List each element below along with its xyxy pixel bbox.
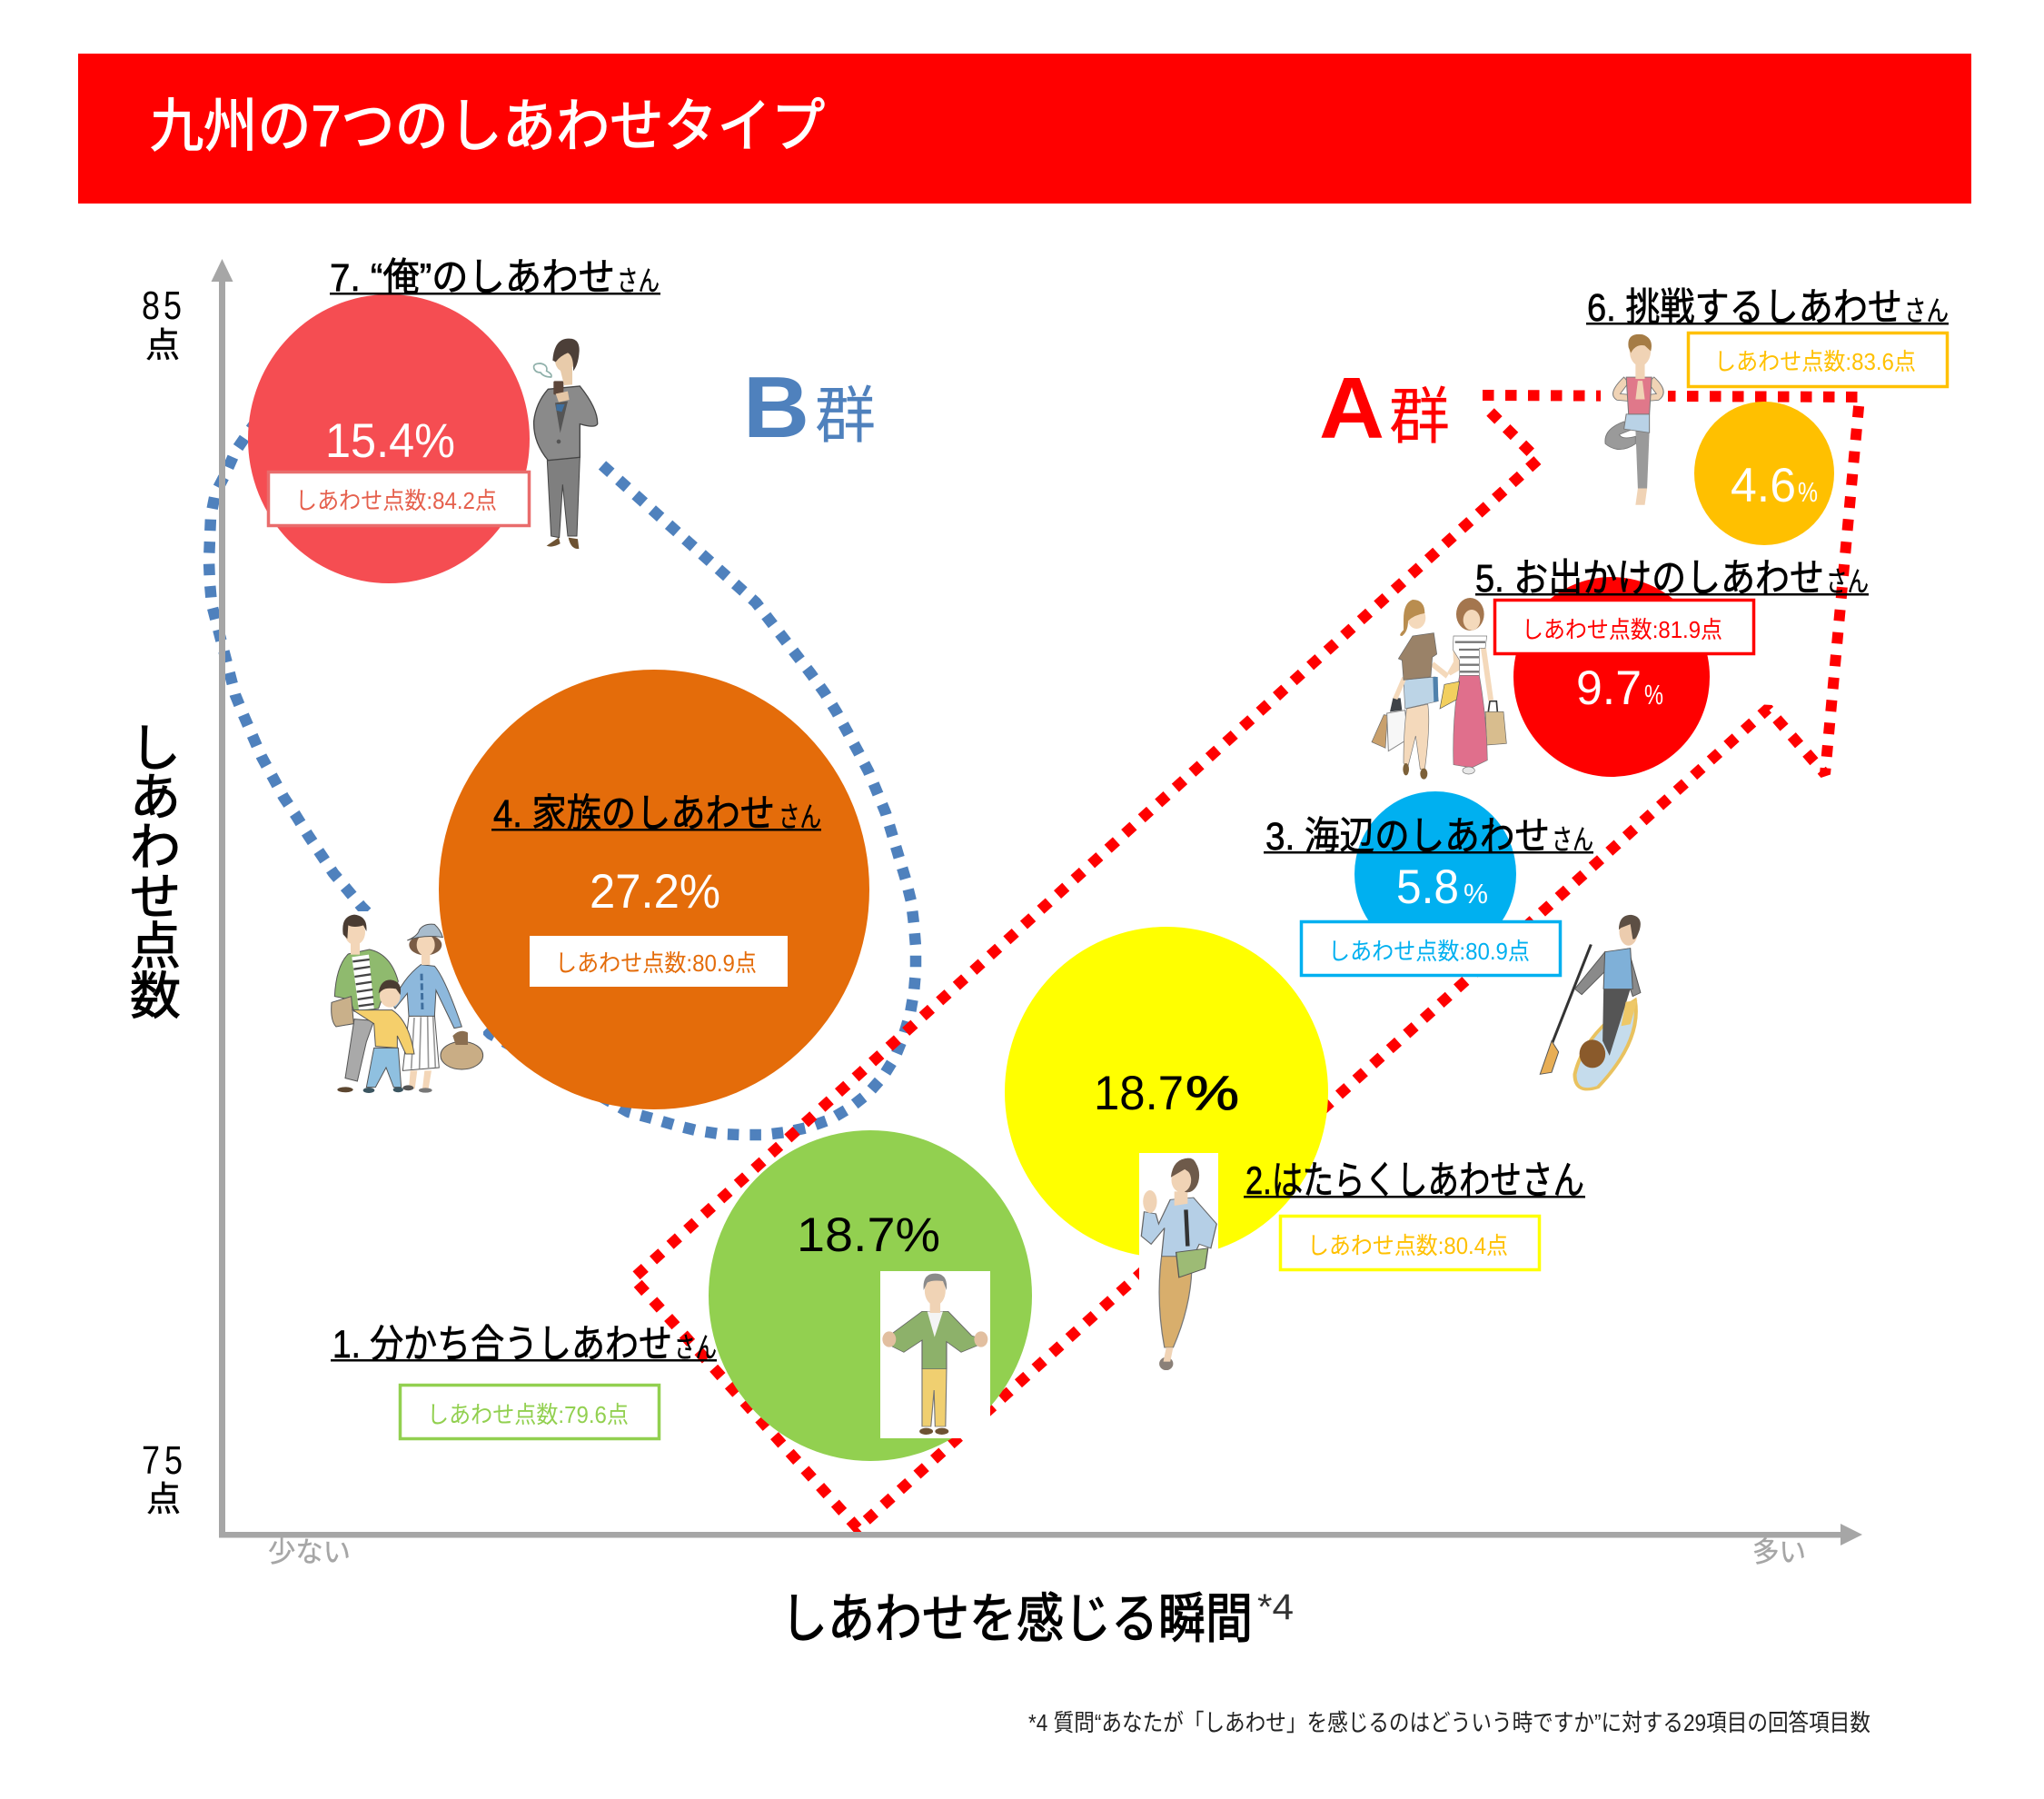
score box 5 bbox=[1495, 600, 1753, 654]
y axis max label: 5 bbox=[164, 283, 182, 328]
y axis min label bbox=[142, 1438, 183, 1519]
icon: man in green sweater bbox=[880, 1271, 990, 1438]
circle 5 bbox=[1513, 577, 1710, 777]
panel: type 4 bbox=[330, 670, 869, 1109]
y axis title: わ bbox=[130, 819, 181, 876]
footnote: *4 質問“あなたが「しあわせ」を感じるのはどういう時ですか”に対する29項目の回答項目数 bbox=[1028, 1709, 1870, 1736]
score box 4: しあわせ点数:80.9点 bbox=[555, 949, 757, 977]
y axis max label: 点 bbox=[145, 327, 180, 365]
score box 3: しあわせ点数:80.9点 bbox=[1328, 938, 1530, 965]
x axis high label: 多い bbox=[1752, 1536, 1806, 1568]
share 6: % bbox=[1798, 476, 1818, 508]
heading 1: 1. 分かち合うしあわせ bbox=[332, 1323, 672, 1367]
panel: type 3 bbox=[1264, 791, 1641, 1089]
panel: type 7 bbox=[248, 256, 660, 583]
score box 1 bbox=[400, 1385, 660, 1439]
heading 7: 7. “俺”のしあわせ bbox=[330, 256, 615, 300]
circle 1 bbox=[709, 1130, 1032, 1461]
heading 7: さん bbox=[617, 265, 660, 297]
y axis title: 点 bbox=[130, 918, 181, 975]
score box 2 bbox=[1281, 1216, 1539, 1270]
score box 2: しあわせ点数:80.4点 bbox=[1307, 1232, 1508, 1259]
y axis title: 数 bbox=[130, 968, 181, 1025]
group B dotted outline bbox=[209, 400, 916, 1135]
y axis max label: 8 bbox=[142, 283, 160, 328]
icon: woman in yoga tree pose bbox=[1601, 334, 1668, 505]
title banner bbox=[78, 54, 1971, 204]
score box 4 bbox=[530, 936, 788, 987]
y axis title: せ bbox=[130, 869, 181, 926]
circle 2 bbox=[1005, 927, 1328, 1257]
icon: two women shopping bbox=[1372, 598, 1506, 780]
heading 6: 6. 挑戦するしあわせ bbox=[1587, 286, 1902, 330]
share 3: 5.8 bbox=[1396, 860, 1459, 914]
x axis title: *4 bbox=[1257, 1587, 1294, 1627]
group A label: A bbox=[1319, 360, 1384, 457]
circle 4 bbox=[439, 670, 869, 1109]
share 1: 18.7% bbox=[797, 1208, 940, 1262]
panel: type 6 bbox=[1586, 286, 1949, 545]
heading 5: さん bbox=[1826, 566, 1869, 598]
panel: type 1 bbox=[331, 1130, 1032, 1461]
heading 3: さん bbox=[1552, 824, 1593, 856]
share 2: % bbox=[1186, 1067, 1239, 1120]
share 4: 27.2% bbox=[590, 865, 720, 919]
y axis max label bbox=[142, 283, 182, 365]
group B label: B bbox=[743, 359, 809, 456]
icon: family of three bbox=[332, 915, 483, 1093]
share 5: 9.7 bbox=[1576, 661, 1642, 715]
score box 7: しあわせ点数:84.2点 bbox=[295, 487, 497, 514]
group B label: 群 bbox=[815, 382, 876, 451]
y axis title: あ bbox=[130, 769, 181, 826]
icon: man in suit with phone bbox=[534, 339, 598, 549]
group A dotted outline bbox=[633, 395, 1860, 1528]
heading 4: 4. 家族のしあわせ bbox=[493, 792, 775, 836]
y axis min label: 7 bbox=[142, 1438, 160, 1483]
group A label bbox=[1319, 360, 1450, 457]
share 2 bbox=[1094, 1067, 1239, 1120]
heading 2: 2.はたらくしあわせさん bbox=[1245, 1159, 1584, 1203]
panel: type 5 bbox=[1372, 557, 1869, 780]
heading 5: 5. お出かけのしあわせ bbox=[1475, 557, 1824, 601]
y axis title: し bbox=[130, 720, 181, 777]
heading 6: さん bbox=[1904, 295, 1949, 327]
score box 1: しあわせ点数:79.6点 bbox=[427, 1401, 629, 1428]
share 7: 15.4% bbox=[325, 414, 455, 468]
y axis min label: 5 bbox=[164, 1438, 183, 1483]
icon: paddle boarder with dog bbox=[1540, 915, 1641, 1089]
icon: working woman with bag bbox=[1139, 1153, 1218, 1372]
share 3: % bbox=[1464, 878, 1488, 909]
share 2: 18.7 bbox=[1094, 1067, 1184, 1120]
score box 5: しあわせ点数:81.9点 bbox=[1522, 616, 1722, 643]
x axis low label: 少ない bbox=[268, 1536, 351, 1568]
share 5: % bbox=[1644, 679, 1663, 711]
y axis title bbox=[130, 720, 181, 1025]
panel: type 2 bbox=[1005, 927, 1585, 1372]
axes bbox=[211, 259, 1862, 1546]
score box 7 bbox=[269, 472, 529, 525]
circle 7 bbox=[248, 294, 530, 583]
share 6: 4.6 bbox=[1731, 459, 1796, 512]
group B label bbox=[743, 359, 876, 456]
score box 3 bbox=[1301, 921, 1561, 976]
x axis title: しあわせを感じる瞬間 bbox=[780, 1589, 1253, 1649]
score box 6: しあわせ点数:83.6点 bbox=[1714, 348, 1916, 375]
y axis min label: 点 bbox=[146, 1481, 181, 1519]
heading 4: さん bbox=[779, 801, 821, 833]
heading 1: さん bbox=[674, 1332, 717, 1364]
group A label: 群 bbox=[1389, 383, 1450, 452]
heading 3: 3. 海辺のしあわせ bbox=[1265, 815, 1550, 859]
circle 6 bbox=[1694, 402, 1834, 545]
score box 6 bbox=[1688, 333, 1948, 387]
circle 3 bbox=[1354, 791, 1516, 957]
title banner: 九州の7つのしあわせタイプ bbox=[150, 94, 825, 159]
